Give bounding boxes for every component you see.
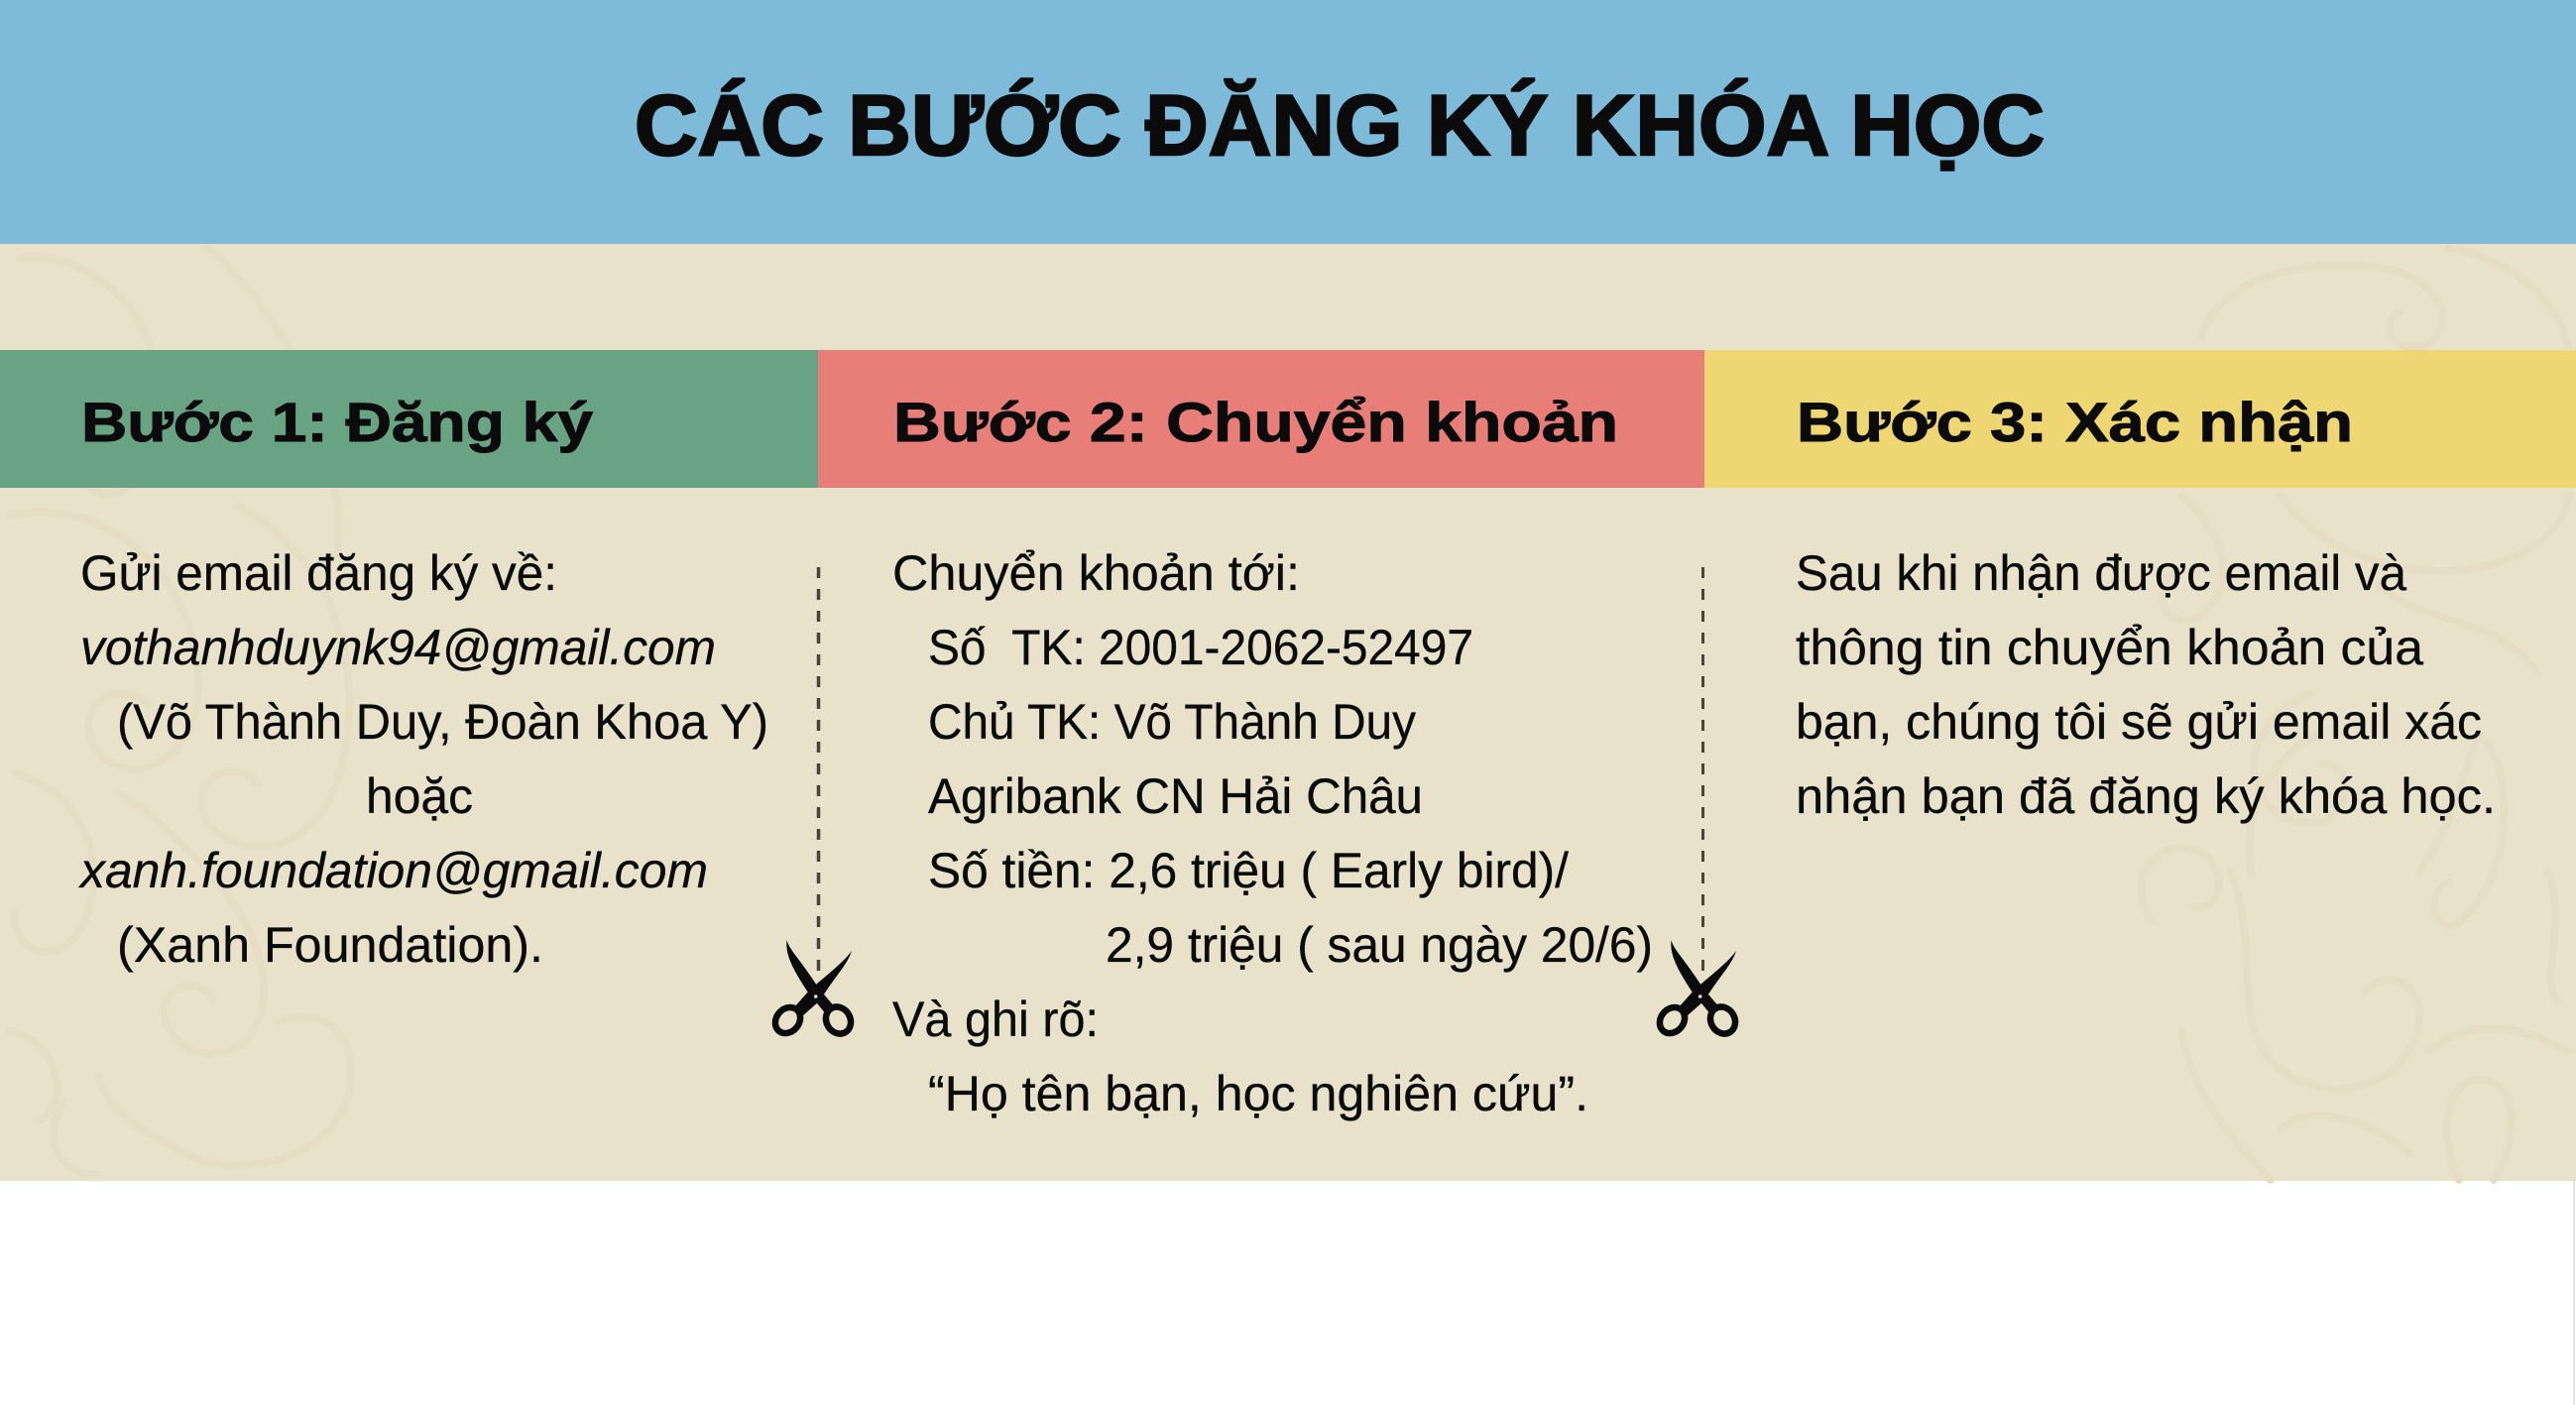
text block: step 1 instructions: (Võ Thành Duy, Đoàn Khoa Y) <box>117 694 768 750</box>
text block: step 3 instructions <box>1796 545 2496 824</box>
icon: scissors 1 <box>770 940 856 1038</box>
text block: step 2 instructions: Agribank CN Hải Châu <box>928 768 1423 824</box>
text block: step 2 instructions <box>892 545 1653 1121</box>
title: CÁC BƯỚC ĐĂNG KÝ KHÓA HỌC <box>635 78 2045 174</box>
cut line and scissors 1 <box>770 567 856 1038</box>
text block: step 1 instructions: (Xanh Foundation). <box>117 917 543 973</box>
text block: step 2 instructions: 2,9 triệu ( sau ngày 20/6) <box>1106 917 1653 973</box>
text block: step 1 instructions: Gửi email đăng ký về: <box>80 545 557 601</box>
text block: step 1 instructions: hoặc <box>366 768 473 824</box>
text block: step 3 instructions: bạn, chúng tôi sẽ gửi email xác <box>1796 694 2482 750</box>
text block: step 2 instructions: Số TK: 2001-2062-52497 <box>928 620 1473 675</box>
icon: scissors 2 <box>1655 940 1740 1038</box>
text block: step 2 instructions: Chủ TK: Võ Thành Duy <box>928 694 1416 750</box>
text block: step 2 instructions: “Họ tên bạn, học nghiên cứu”. <box>928 1066 1588 1121</box>
panel: step 2 <box>818 350 1704 1121</box>
text block: step 1 instructions <box>78 545 768 973</box>
heading: step 1: Bước 1: Đăng ký <box>81 391 593 453</box>
text block: step 2 instructions: Chuyển khoản tới: <box>892 545 1300 601</box>
cut line and scissors 2 <box>1655 567 1740 1038</box>
text block: step 2 instructions: Số tiền: 2,6 triệu ( Early bird)/ <box>928 843 1569 898</box>
panel: step 1 <box>0 350 818 973</box>
text block: step 3 instructions: nhận bạn đã đăng ký khóa học. <box>1796 768 2496 824</box>
text block: step 1 instructions: xanh.foundation@gmail.com <box>78 843 708 898</box>
heading: step 2: Bước 2: Chuyển khoản <box>893 391 1618 453</box>
heading: step 3: Bước 3: Xác nhận <box>1797 391 2353 453</box>
text block: step 2 instructions: Và ghi rõ: <box>892 992 1099 1047</box>
panel: step 3 <box>1704 350 2576 824</box>
text block: step 3 instructions: Sau khi nhận được email và <box>1796 545 2406 601</box>
header band <box>0 0 2576 244</box>
panel: beige background with ornaments <box>0 244 2576 1181</box>
text block: step 3 instructions: thông tin chuyển khoản của <box>1796 620 2423 675</box>
text block: step 1 instructions: vothanhduynk94@gmail.com <box>80 620 716 675</box>
